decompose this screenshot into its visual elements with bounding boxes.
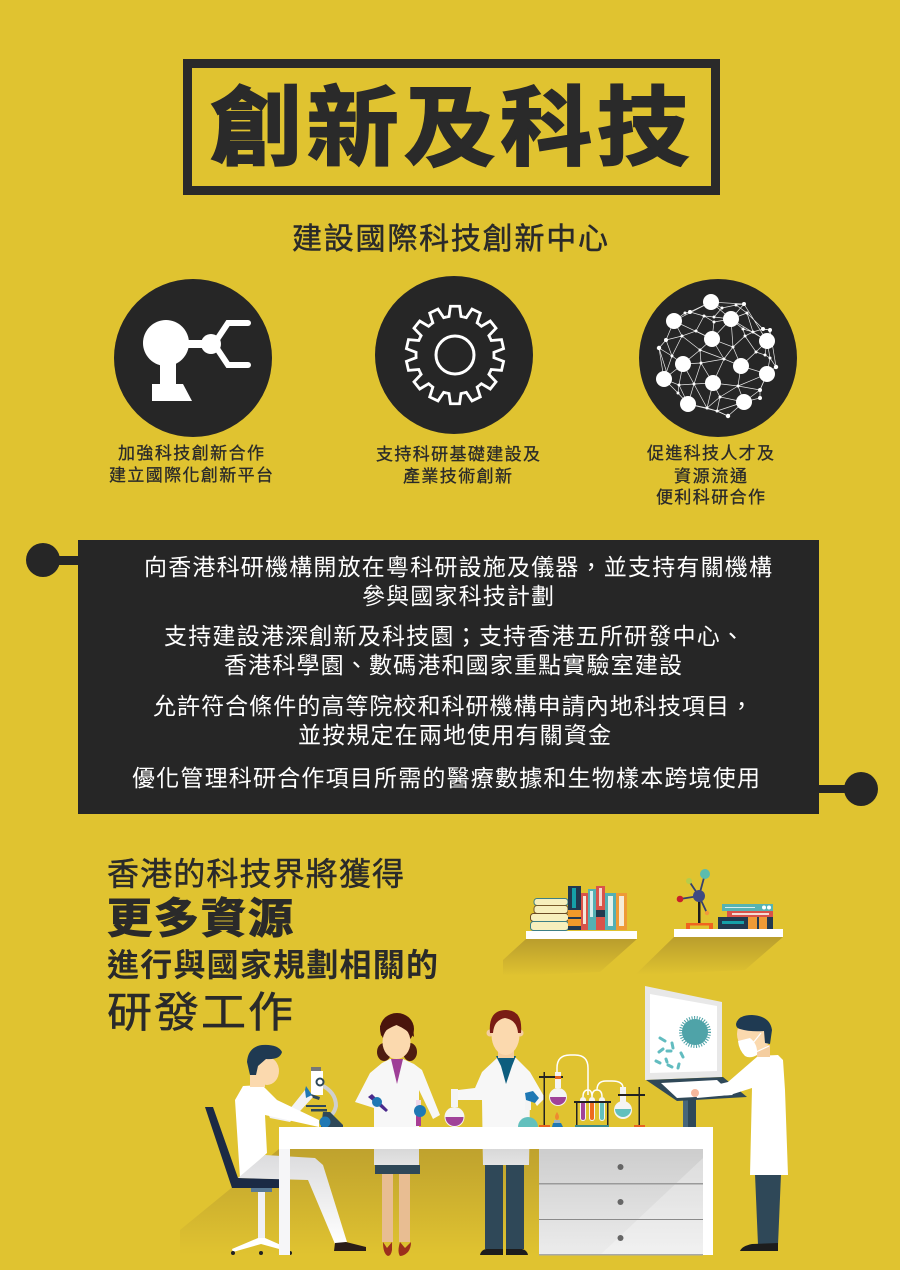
heading: more resources: 研發工作 [107, 990, 293, 1037]
caption: column 2: 支持科研基礎建設及 [376, 445, 540, 464]
panel: measures: 參與國家科技計劃 [362, 583, 554, 609]
caption: column 3: 資源流通 [674, 467, 747, 486]
connector: right [817, 772, 878, 806]
trousers [485, 1165, 503, 1249]
face [382, 1025, 410, 1059]
illustration: left shelf with books [503, 886, 637, 976]
heading: more resources: 更多資源 [107, 896, 293, 943]
virus [681, 1018, 709, 1046]
gloves [372, 1097, 382, 1107]
bacteria [656, 1038, 683, 1068]
head [486, 1030, 494, 1036]
gloves [320, 1116, 330, 1128]
illustration: lab glassware [539, 1055, 645, 1128]
leg [238, 1155, 347, 1244]
illustration: right shelf with molecule model [635, 869, 783, 975]
caption: column 3: 便利科研合作 [656, 488, 765, 507]
heading: more resources: 進行與國家規劃相關的 [107, 947, 438, 983]
caption: column 3: 促進科技人才及 [647, 444, 774, 463]
panel: measures: 香港科學園、數碼港和國家重點實驗室建設 [224, 652, 682, 678]
panel: measures: 並按規定在兩地使用有關資金 [298, 722, 611, 748]
burner [552, 1112, 563, 1127]
panel: measures [78, 540, 819, 814]
panel: measures: 支持建設港深創新及科技園；支持香港五所研發中心、 [164, 623, 744, 649]
illustration: male scientist with flasks [444, 1010, 545, 1255]
hair [736, 1015, 772, 1044]
microscope [306, 1067, 343, 1127]
caption: column 1: 建立國際化創新平台 [109, 466, 273, 485]
retort stand right [618, 1087, 645, 1128]
panel: measures: 允許符合條件的高等院校和科研機構申請內地科技項目， [153, 693, 753, 719]
hand [691, 1089, 699, 1097]
head [250, 1075, 265, 1087]
collar and tie [496, 1056, 516, 1084]
shoes [383, 1242, 392, 1256]
icon: robot arm [114, 279, 272, 437]
back arm [262, 1090, 313, 1122]
coat and arm [695, 1055, 788, 1175]
skirt [375, 1165, 420, 1174]
icon: gear [375, 276, 533, 434]
retort stand left [539, 1072, 563, 1128]
glass tubing [557, 1055, 623, 1097]
teal flask [518, 1100, 538, 1127]
coat [355, 1059, 440, 1165]
illustration: seated scientist with microscope [205, 1045, 366, 1255]
caption: column 2: 產業技術創新 [403, 467, 512, 486]
hair [377, 1043, 391, 1061]
purple top [391, 1059, 403, 1084]
illustration: scientist with mask at monitor [691, 1015, 788, 1251]
caption: column 1: 加強科技創新合作 [118, 444, 264, 463]
title [188, 64, 716, 190]
shoes [740, 1243, 778, 1251]
neck and face [757, 1045, 770, 1057]
chair [205, 1107, 292, 1255]
caption: column 3 [647, 444, 774, 507]
connector: left [26, 543, 80, 577]
panel: measures: 向香港科研機構開放在粵科研設施及儀器，並支持有關機構 [144, 554, 772, 580]
trousers [755, 1174, 781, 1245]
glove [525, 1091, 539, 1103]
heading: more resources: 香港的科技界將獲得 [107, 856, 404, 892]
panel: measures: 優化管理科研合作項目所需的醫療數據和生物樣本跨境使用 [132, 765, 760, 791]
pipette and test tube [368, 1094, 388, 1112]
shoes [480, 1249, 503, 1255]
illustration: table shadow [180, 1149, 539, 1255]
heading: more resources [107, 856, 438, 1037]
legs [382, 1170, 393, 1242]
subtitle: 建設國際科技創新中心 [292, 223, 608, 256]
mask [738, 1038, 757, 1057]
torso and arm [235, 1085, 319, 1178]
caption: column 1 [109, 444, 273, 485]
caption: column 2 [376, 445, 540, 486]
illustration: lab table [279, 1127, 713, 1256]
round flask [549, 1072, 567, 1106]
test tube rack [574, 1097, 611, 1127]
purple flask [444, 1089, 464, 1127]
icon: network globe [639, 279, 797, 437]
coat [458, 1058, 545, 1165]
illustration: female scientist [355, 1013, 440, 1256]
shoe [334, 1242, 366, 1251]
title: 創新及科技 [210, 80, 689, 176]
illustration: computer monitor [645, 986, 747, 1127]
teal round flask [614, 1087, 632, 1119]
